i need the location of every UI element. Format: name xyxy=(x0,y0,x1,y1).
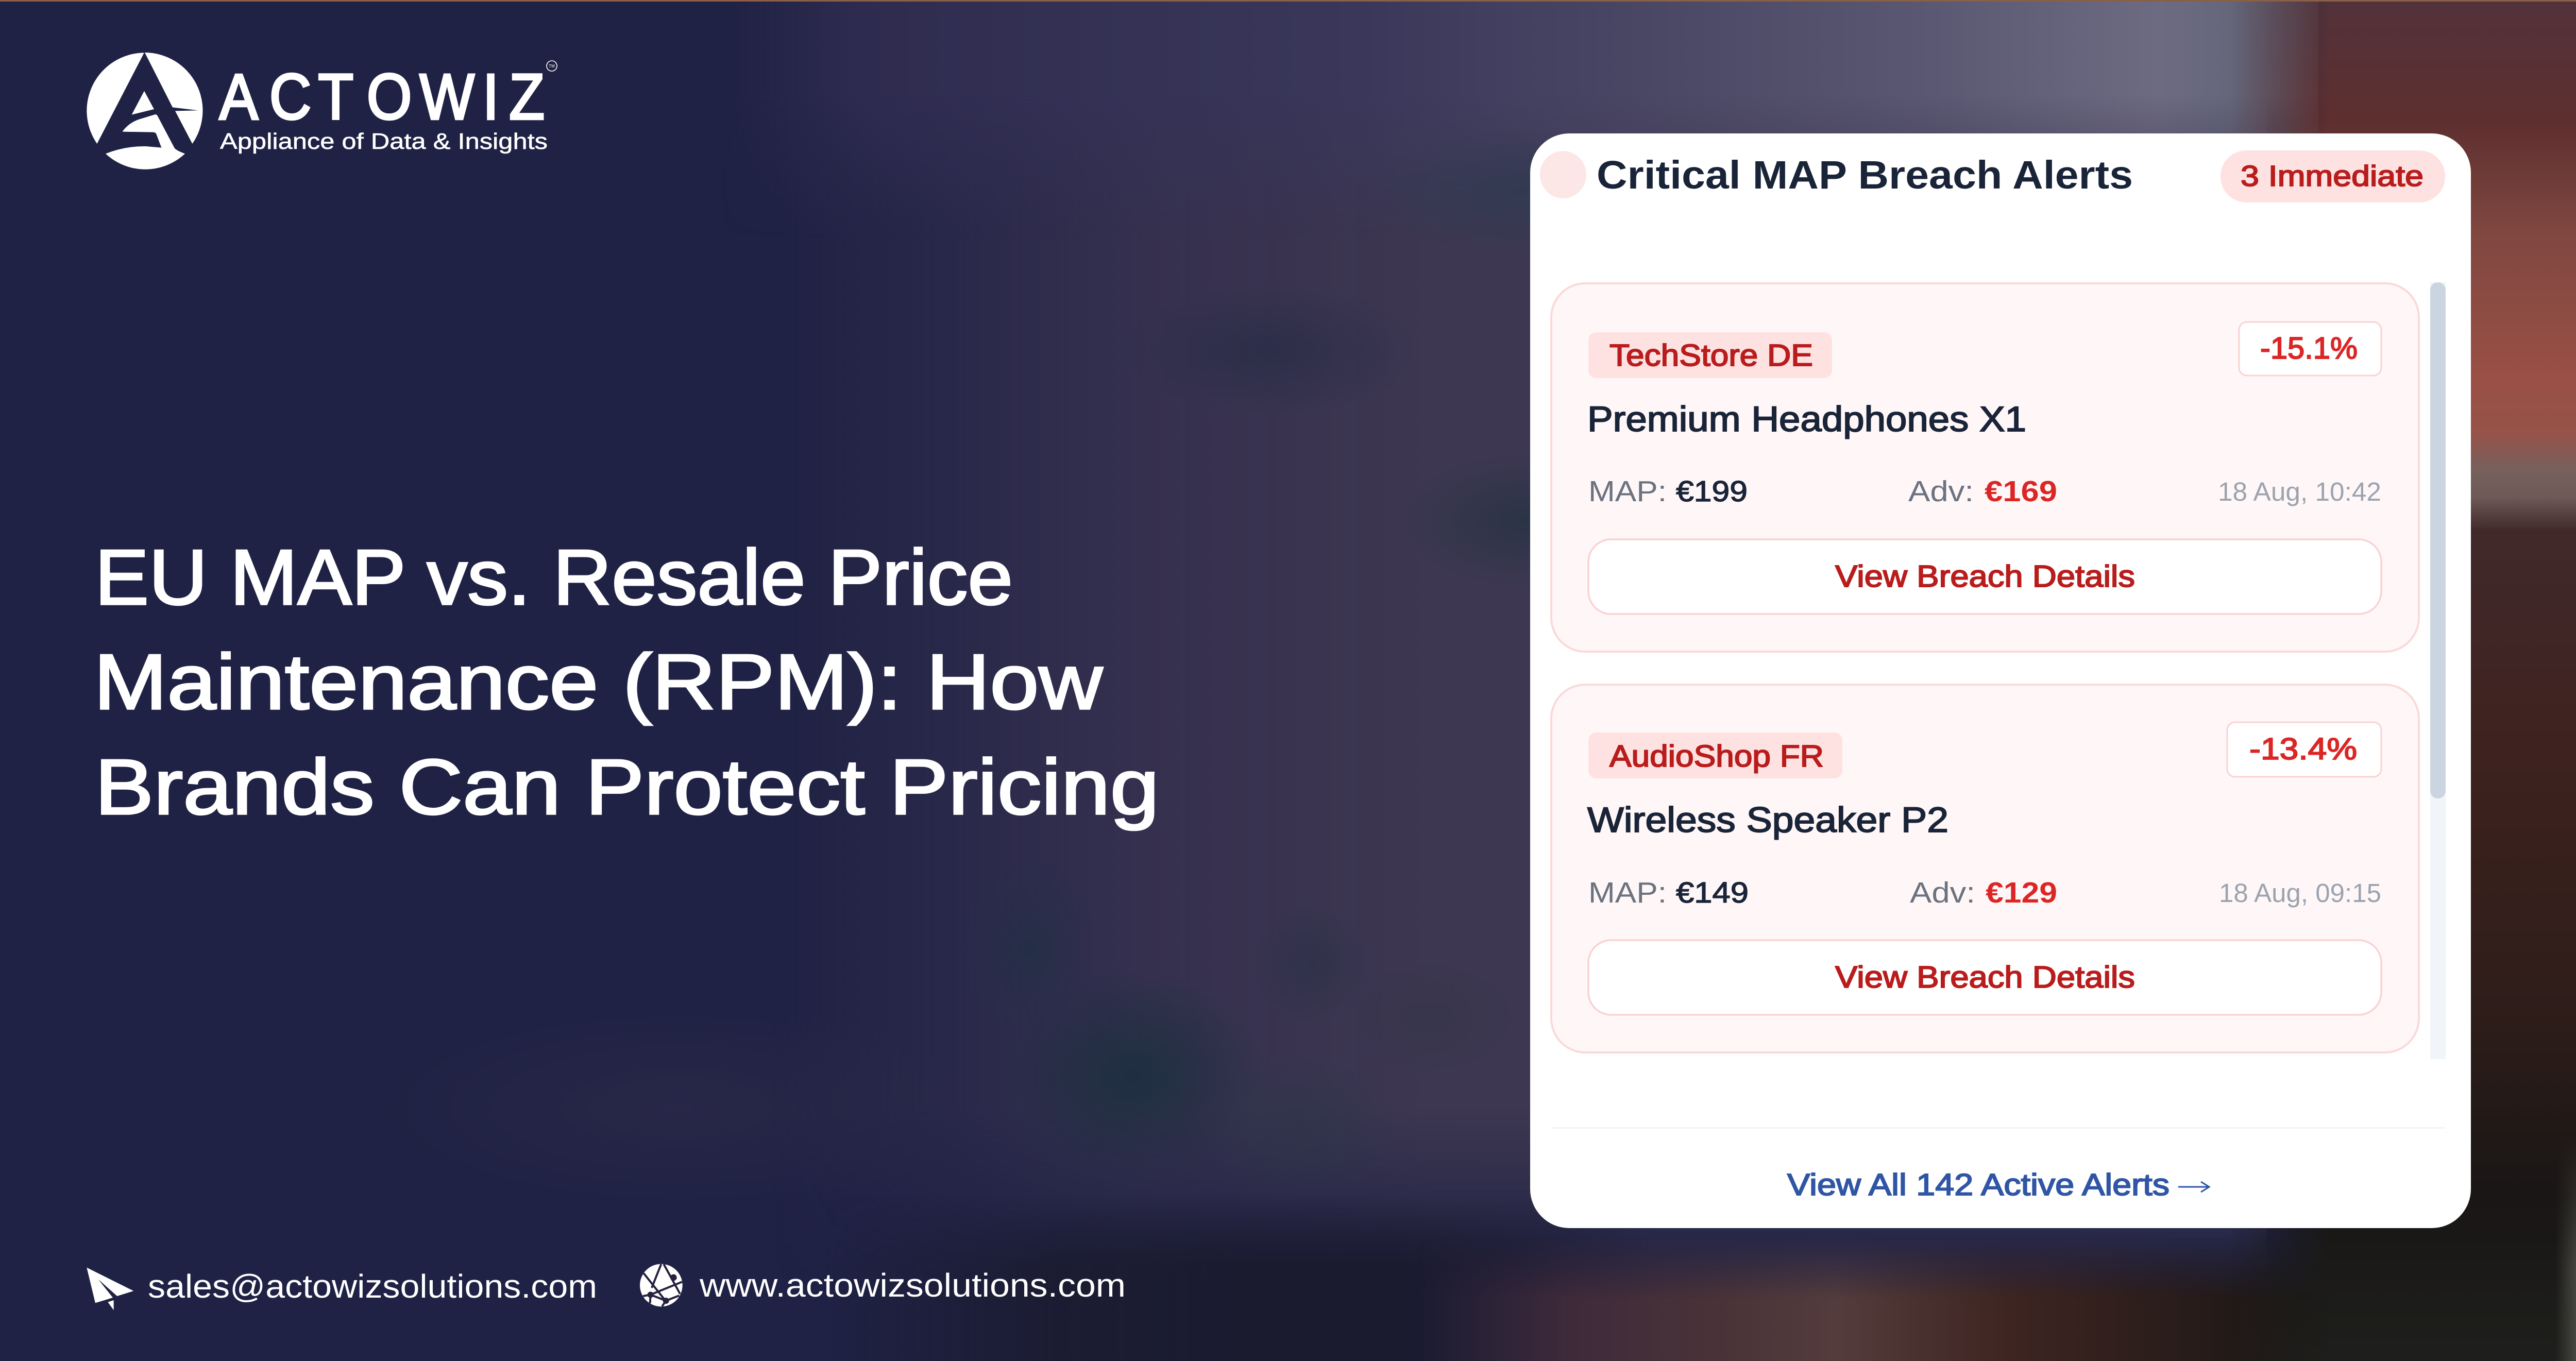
retailer tag xyxy=(1588,332,1832,378)
title: Brands Can Protect Pricing xyxy=(95,743,1159,831)
logo wordmark: ACTOWIZ xyxy=(219,61,545,133)
retailer tag: TechStore DE xyxy=(1609,338,1813,372)
icon: globe network xyxy=(640,1264,683,1306)
arrow xyxy=(2178,1182,2209,1192)
trademark mark: TM xyxy=(549,64,555,69)
button: view breach details: View Breach Details xyxy=(1835,559,2135,593)
timestamp: 18 Aug, 09:15 xyxy=(2219,878,2381,908)
panel: critical MAP breach alerts card xyxy=(1530,133,2471,1228)
title: Maintenance (RPM): How xyxy=(94,638,1103,726)
title xyxy=(94,534,1159,831)
card header xyxy=(1540,150,2445,202)
button: view breach details xyxy=(1588,940,2381,1015)
retailer tag: AudioShop FR xyxy=(1609,739,1824,773)
email address: sales@actowizsolutions.com xyxy=(148,1268,597,1305)
advertised price: Adv: xyxy=(1908,475,1974,508)
advertised price: €129 xyxy=(1986,876,2057,909)
discount badge xyxy=(2239,322,2381,376)
product name: Premium Headphones X1 xyxy=(1587,399,2026,439)
alert card: AudioShop FR xyxy=(1551,685,2419,1052)
advertised price: €169 xyxy=(1985,475,2057,508)
button: view breach details: View Breach Details xyxy=(1835,960,2135,994)
discount badge: -15.1% xyxy=(2260,331,2358,365)
badge: 3 immediate xyxy=(2221,150,2445,202)
alert card: TechStore DE xyxy=(1551,283,2419,652)
MAP price: MAP: xyxy=(1588,475,1667,508)
icon: alert dot xyxy=(1540,151,1586,198)
MAP price xyxy=(1588,475,1748,508)
footer link: view all alerts: View All 142 Active Alerts xyxy=(1787,1168,2170,1202)
advertised price xyxy=(1910,876,2057,909)
badge: 3 immediate: 3 Immediate xyxy=(2241,160,2424,193)
product name: Wireless Speaker P2 xyxy=(1587,800,1948,840)
discount badge: -13.4% xyxy=(2249,732,2357,766)
contact: website xyxy=(640,1264,1126,1306)
MAP price: €149 xyxy=(1676,876,1749,909)
trademark mark xyxy=(547,61,557,71)
contact: email xyxy=(87,1268,597,1310)
title: EU MAP vs. Resale Price xyxy=(95,534,1013,621)
website address: www.actowizsolutions.com xyxy=(699,1267,1126,1304)
MAP price xyxy=(1588,876,1749,909)
logo tagline: Appliance of Data & Insights xyxy=(220,129,548,154)
advertised price: Adv: xyxy=(1910,876,1975,909)
scrollbar xyxy=(2430,282,2446,1059)
retailer tag xyxy=(1588,733,1842,778)
discount badge xyxy=(2227,722,2381,777)
MAP price: MAP: xyxy=(1588,876,1667,909)
advertised price xyxy=(1908,475,2057,508)
MAP price: €199 xyxy=(1676,475,1748,508)
icon: logo emblem xyxy=(87,53,202,169)
logo: Actowiz xyxy=(87,53,557,169)
button: view breach details xyxy=(1588,539,2381,614)
icon: paper plane xyxy=(87,1268,133,1310)
timestamp: 18 Aug, 10:42 xyxy=(2218,477,2381,506)
card heading: Critical MAP Breach Alerts xyxy=(1597,153,2133,197)
